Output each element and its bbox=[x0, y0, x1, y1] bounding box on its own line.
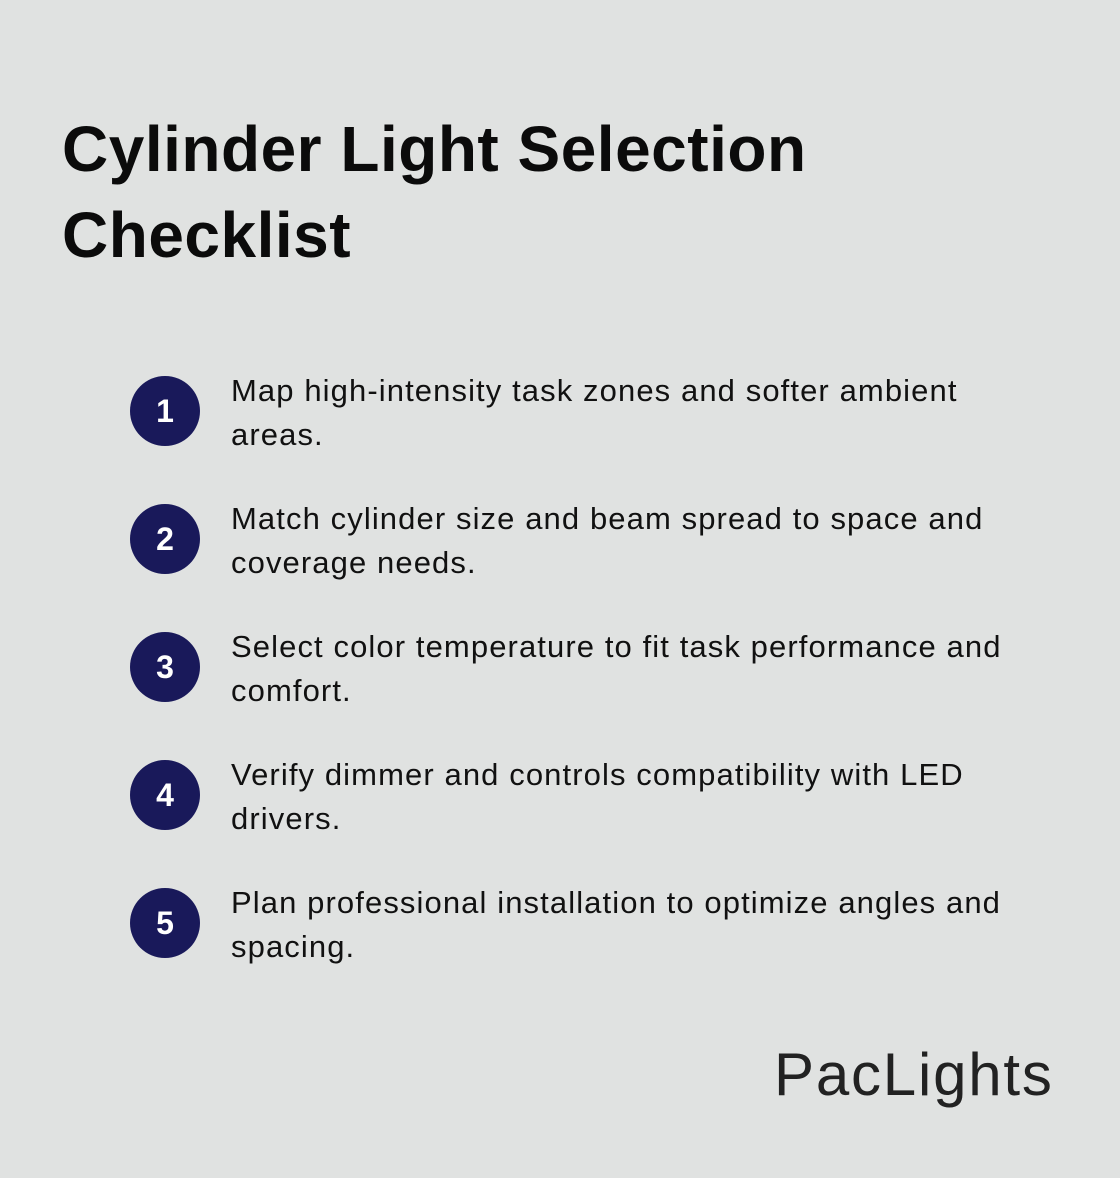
item 4 bbox=[130, 757, 964, 836]
number badge 3: 3 bbox=[156, 649, 174, 685]
logo: PacLights bbox=[774, 1041, 1054, 1108]
title bbox=[62, 113, 807, 271]
text 4: Verify dimmer and controls compatibility with LED drivers. bbox=[231, 757, 964, 836]
item 5 bbox=[130, 885, 1001, 964]
number badge 4: 4 bbox=[156, 777, 174, 813]
title: Cylinder Light Selection bbox=[62, 113, 807, 185]
text 2: Match cylinder size and beam spread to space and coverage needs. bbox=[231, 501, 983, 580]
text 1: Map high-intensity task zones and softer ambient areas. bbox=[231, 373, 958, 452]
text 5: Plan professional installation to optimize angles and spacing. bbox=[231, 885, 1001, 964]
item 2 bbox=[130, 501, 983, 580]
number badge 2: 2 bbox=[156, 521, 174, 557]
number badge 1 bbox=[130, 376, 200, 446]
title: Checklist bbox=[62, 199, 351, 271]
text 3: Select color temperature to fit task performance and comfort. bbox=[231, 629, 1002, 708]
item 3 bbox=[130, 629, 1002, 708]
number badge 5: 5 bbox=[156, 905, 174, 941]
number badge 4 bbox=[130, 760, 200, 830]
number badge 1: 1 bbox=[156, 393, 174, 429]
number badge 2 bbox=[130, 504, 200, 574]
number badge 3 bbox=[130, 632, 200, 702]
number badge 5 bbox=[130, 888, 200, 958]
item 1 bbox=[130, 373, 958, 452]
